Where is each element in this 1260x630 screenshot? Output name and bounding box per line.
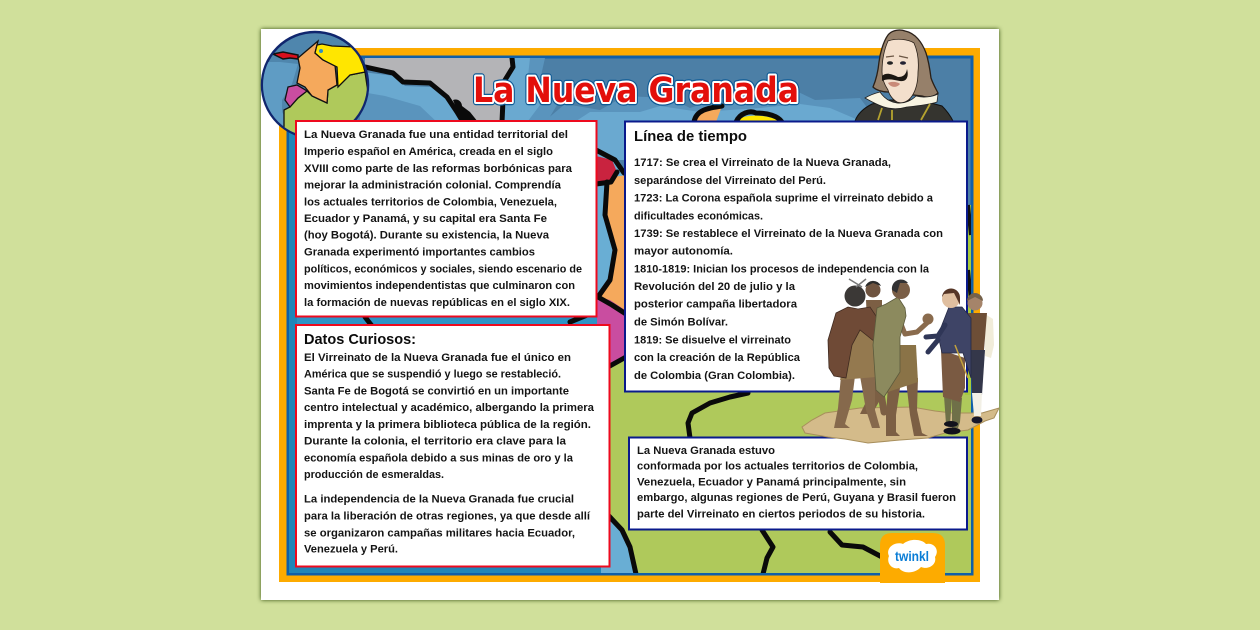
ground patch: [802, 407, 999, 443]
panel: línea de tiempo: 1717: Se crea el Virreinato de la Nueva Granada,: [634, 157, 891, 169]
figure: man in brown cloak: [828, 279, 880, 428]
green land: [606, 356, 971, 574]
left and bottom water strip: [289, 120, 297, 573]
panel: datos curiosos: [296, 325, 610, 566]
panel: datos curiosos: El Virreinato de la Nueva Granada fue el único en: [304, 352, 571, 364]
panel: línea de tiempo: con la creación de la República: [634, 352, 801, 364]
panel: datos curiosos: producción de esmeraldas.: [304, 469, 444, 481]
panel: línea de tiempo: [625, 122, 967, 392]
panel: introduction: [296, 121, 596, 316]
panel: introduction: políticos, económicos y sociales, siendo escenario de: [304, 264, 582, 276]
title: La Nueva Granada: [473, 71, 799, 111]
panel: línea de tiempo: de Simón Bolívar.: [634, 316, 728, 328]
panel: datos curiosos: La independencia de la Nueva Granada fue crucial: [304, 494, 574, 506]
panel: datos curiosos: centro intelectual y académico, albergando la primera: [304, 402, 595, 414]
panel: datos curiosos: América que se suspendió y luego se restableció.: [304, 368, 561, 380]
background map: [288, 57, 972, 574]
infographic canvas: [258, 26, 1002, 604]
red country: [598, 156, 616, 182]
figure: rear man: [860, 281, 884, 414]
figure: man in fur cloak: [873, 279, 934, 436]
panel: línea de tiempo: 1723: La Corona española suprime el virreinato debido a: [634, 192, 934, 204]
heading: línea de tiempo: Línea de tiempo: [634, 128, 747, 145]
figure: European in blue coat: [926, 288, 971, 434]
panel: línea de tiempo: Revolución del 20 de julio y la: [634, 281, 796, 293]
figure: rear European: [967, 293, 994, 424]
panel: datos curiosos: para la liberación de otras regiones, ya que desde allí: [304, 510, 591, 522]
panel: introduction: XVIII como parte de las reformas borbónicas para: [304, 163, 573, 175]
panel: datos curiosos: imprenta y la primera biblioteca pública de la región.: [304, 419, 591, 431]
shelf bumps under the title: [548, 92, 866, 120]
coastal shelves, top left: [360, 93, 434, 120]
panel: territorio note: La Nueva Granada estuvo: [637, 445, 775, 457]
panel: introduction: mejorar la administración colonial. Comprendía: [304, 180, 562, 192]
grey land: [365, 58, 513, 122]
panel: línea de tiempo: mayor autonomía.: [634, 246, 733, 258]
panel: territorio note: [629, 438, 967, 530]
illustration: globe of the viceroyalty: [262, 32, 375, 140]
logo: twinkl: twinkl: [895, 548, 929, 564]
illustration: indigenous people meeting Europeans: [802, 279, 999, 443]
panel: territorio note: conformada por los actuales territorios de Colombia,: [637, 460, 918, 472]
panel: introduction: movimientos independentistas que culminaron con: [304, 280, 575, 292]
lower coast water: [601, 522, 634, 573]
logo: twinkl: [880, 533, 945, 583]
orange frame: [279, 48, 980, 582]
title: La Nueva Granada: [473, 71, 799, 111]
panel: línea de tiempo: de Colombia (Gran Colombia).: [634, 370, 795, 382]
panel: introduction: la formación de nuevas repúblicas en el siglo XIX.: [304, 297, 570, 309]
panel: introduction: La Nueva Granada fue una entidad territorial del: [304, 129, 568, 141]
map borders: [365, 58, 971, 574]
panel: datos curiosos: Durante la colonia, el territorio era clave para la: [304, 436, 567, 448]
white poster card: [261, 29, 999, 600]
title: La Nueva Granada: [473, 71, 799, 111]
illustration: viceroy portrait: [855, 30, 953, 121]
panel: datos curiosos: Santa Fe de Bogotá se convirtió en un importante: [304, 386, 569, 398]
panel: línea de tiempo: posterior campaña libertadora: [634, 298, 798, 310]
panel: introduction: (hoy Bogotá). Durante su existencia, la Nueva: [304, 230, 550, 242]
panel: datos curiosos: Venezuela y Perú.: [304, 544, 398, 556]
panel: introduction: Granada experimentó importantes cambios: [304, 246, 535, 258]
heading: datos curiosos: Datos Curiosos:: [304, 331, 416, 348]
land hints under title: [697, 108, 721, 120]
panel: introduction: Imperio español en América, creada en el siglo: [304, 146, 553, 158]
panel: datos curiosos: se organizaron campañas militares hacia Ecuador,: [304, 528, 575, 540]
panel: territorio note: parte del Virreinato en ciertos periodos de su historia.: [637, 508, 925, 520]
panel: línea de tiempo: separándose del Virreinato del Perú.: [634, 175, 826, 187]
shelf between panels: [598, 125, 624, 160]
panel: línea de tiempo: dificultades económicas.: [634, 210, 763, 222]
magenta country: [597, 299, 624, 363]
panel: territorio note: embargo, algunas regiones de Perú, Guyana y Brasil fueron: [637, 492, 956, 504]
panel: introduction: los actuales territorios de Colombia, Venezuela,: [304, 196, 557, 208]
orange country: [602, 176, 624, 310]
panel: datos curiosos: economía española debido a sus minas de oro y la: [304, 452, 574, 464]
panel: línea de tiempo: 1819: Se disuelve el virreinato: [634, 334, 791, 346]
panel: territorio note: Venezuela, Ecuador y Panamá principalmente, sin: [637, 476, 906, 488]
panel: introduction: Ecuador y Panamá, y su capital era Santa Fe: [304, 213, 547, 225]
panel: línea de tiempo: 1810-1819: Inician los procesos de independencia con la: [634, 264, 930, 276]
panel: línea de tiempo: 1739: Se restablece el Virreinato de la Nueva Granada con: [634, 228, 943, 240]
